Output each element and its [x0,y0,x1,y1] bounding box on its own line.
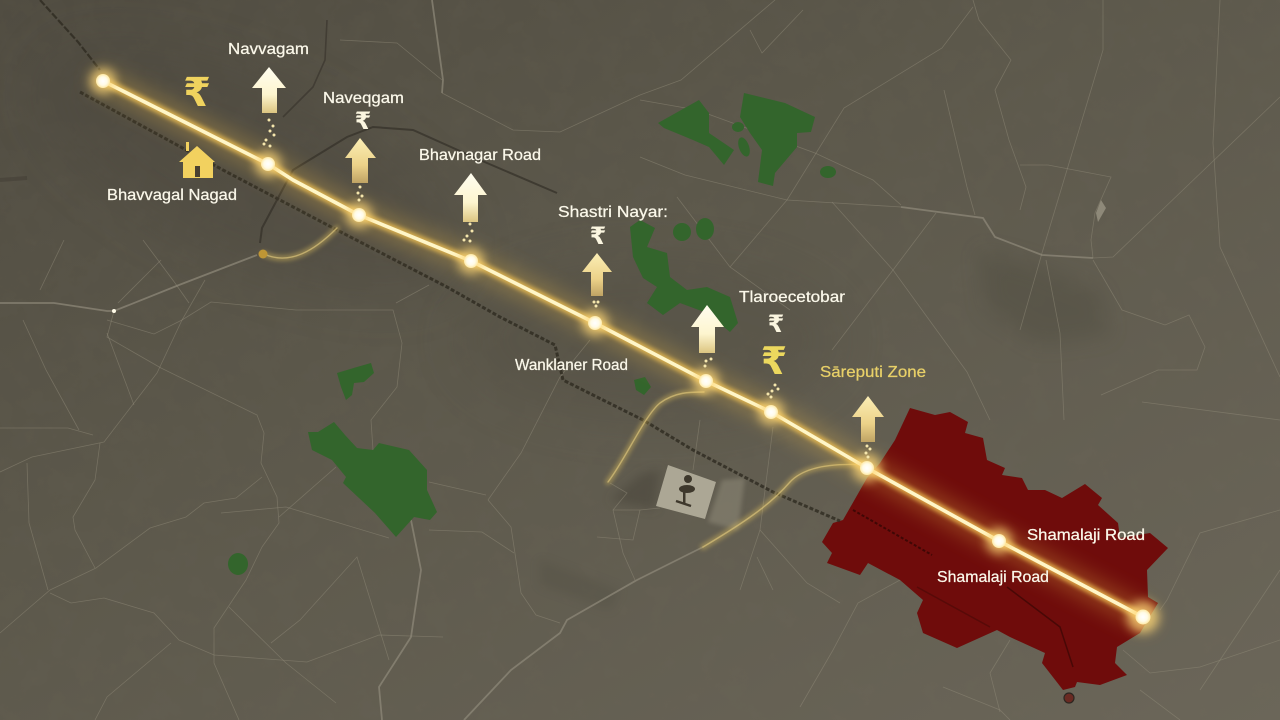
station labels: Sāreputi Zone [820,364,926,381]
forest patches [228,93,836,575]
rupee symbols: ₹ [768,311,784,338]
railway line [0,0,1073,667]
marker: small red ring [1064,693,1074,703]
station labels [107,41,1145,586]
rupee symbols: ₹ [355,108,371,135]
rupee symbols: ₹ [183,71,211,115]
station nodes [90,68,1159,633]
station labels: Tlaroecetobar [739,289,846,306]
station labels: Shamalaji Road [1027,527,1145,544]
station labels: Shastri Nayar: [558,204,668,221]
rising value arrows [252,67,884,442]
dotted trails under arrows [262,118,872,458]
junction dots [112,250,268,313]
icon: house [179,142,215,178]
glowing branch curves [264,228,866,547]
station labels: Shamalaji Road [937,569,1049,586]
rupee symbols [183,71,787,383]
station labels: Bhavnagar Road [419,147,541,164]
station labels: Navvagam [228,41,309,58]
rupee symbols: ₹ [761,341,787,383]
station labels: Bhavvagal Nagad [107,187,237,204]
station labels: Naveqgam [323,90,404,107]
rupee symbols: ₹ [590,223,606,250]
zone: high value red district [822,408,1168,690]
station labels: Wanklaner Road [515,357,628,374]
glowing main transit line [103,81,1143,617]
sign icon: restricted site marker [656,465,716,519]
